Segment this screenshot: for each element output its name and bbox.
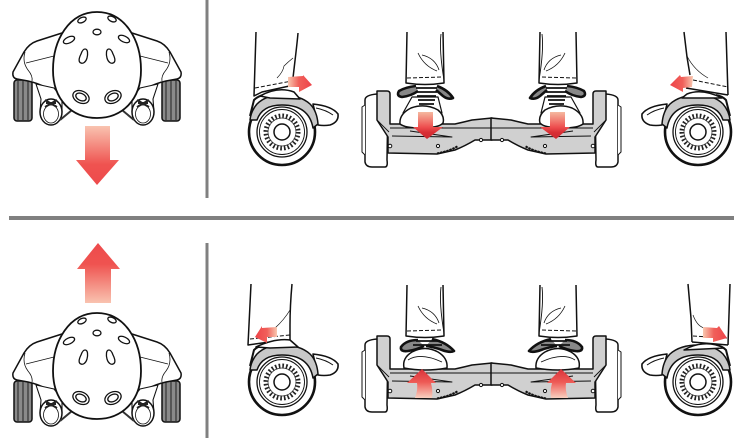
arrow: lean forward (76, 126, 119, 185)
right leg and shoe, pressing heels (529, 285, 582, 398)
side view left, upper (249, 32, 338, 165)
front view hoverboard, lower (362, 285, 621, 412)
left leg and shoe, pressing heels (401, 285, 454, 398)
side view right, upper (642, 32, 731, 165)
arrow: toes down, right foot (670, 75, 693, 92)
side view right, lower (642, 284, 731, 415)
divider: upper vertical (206, 0, 208, 198)
left leg and shoe, pressing toes (398, 32, 453, 139)
arrow: toes down, left foot (288, 75, 312, 92)
front view hoverboard, upper (362, 32, 621, 167)
arrow: heels down, left foot (255, 326, 277, 343)
arrow: lean backward (77, 243, 120, 303)
divider: lower vertical (206, 243, 208, 438)
rider top view: leaning forward (13, 12, 181, 125)
arrow: heels down, right foot (703, 326, 727, 342)
rider top view: leaning backward (13, 313, 181, 426)
divider: horizontal (9, 216, 734, 220)
right leg and shoe, pressing toes (530, 32, 585, 139)
side view left, lower (248, 284, 338, 415)
